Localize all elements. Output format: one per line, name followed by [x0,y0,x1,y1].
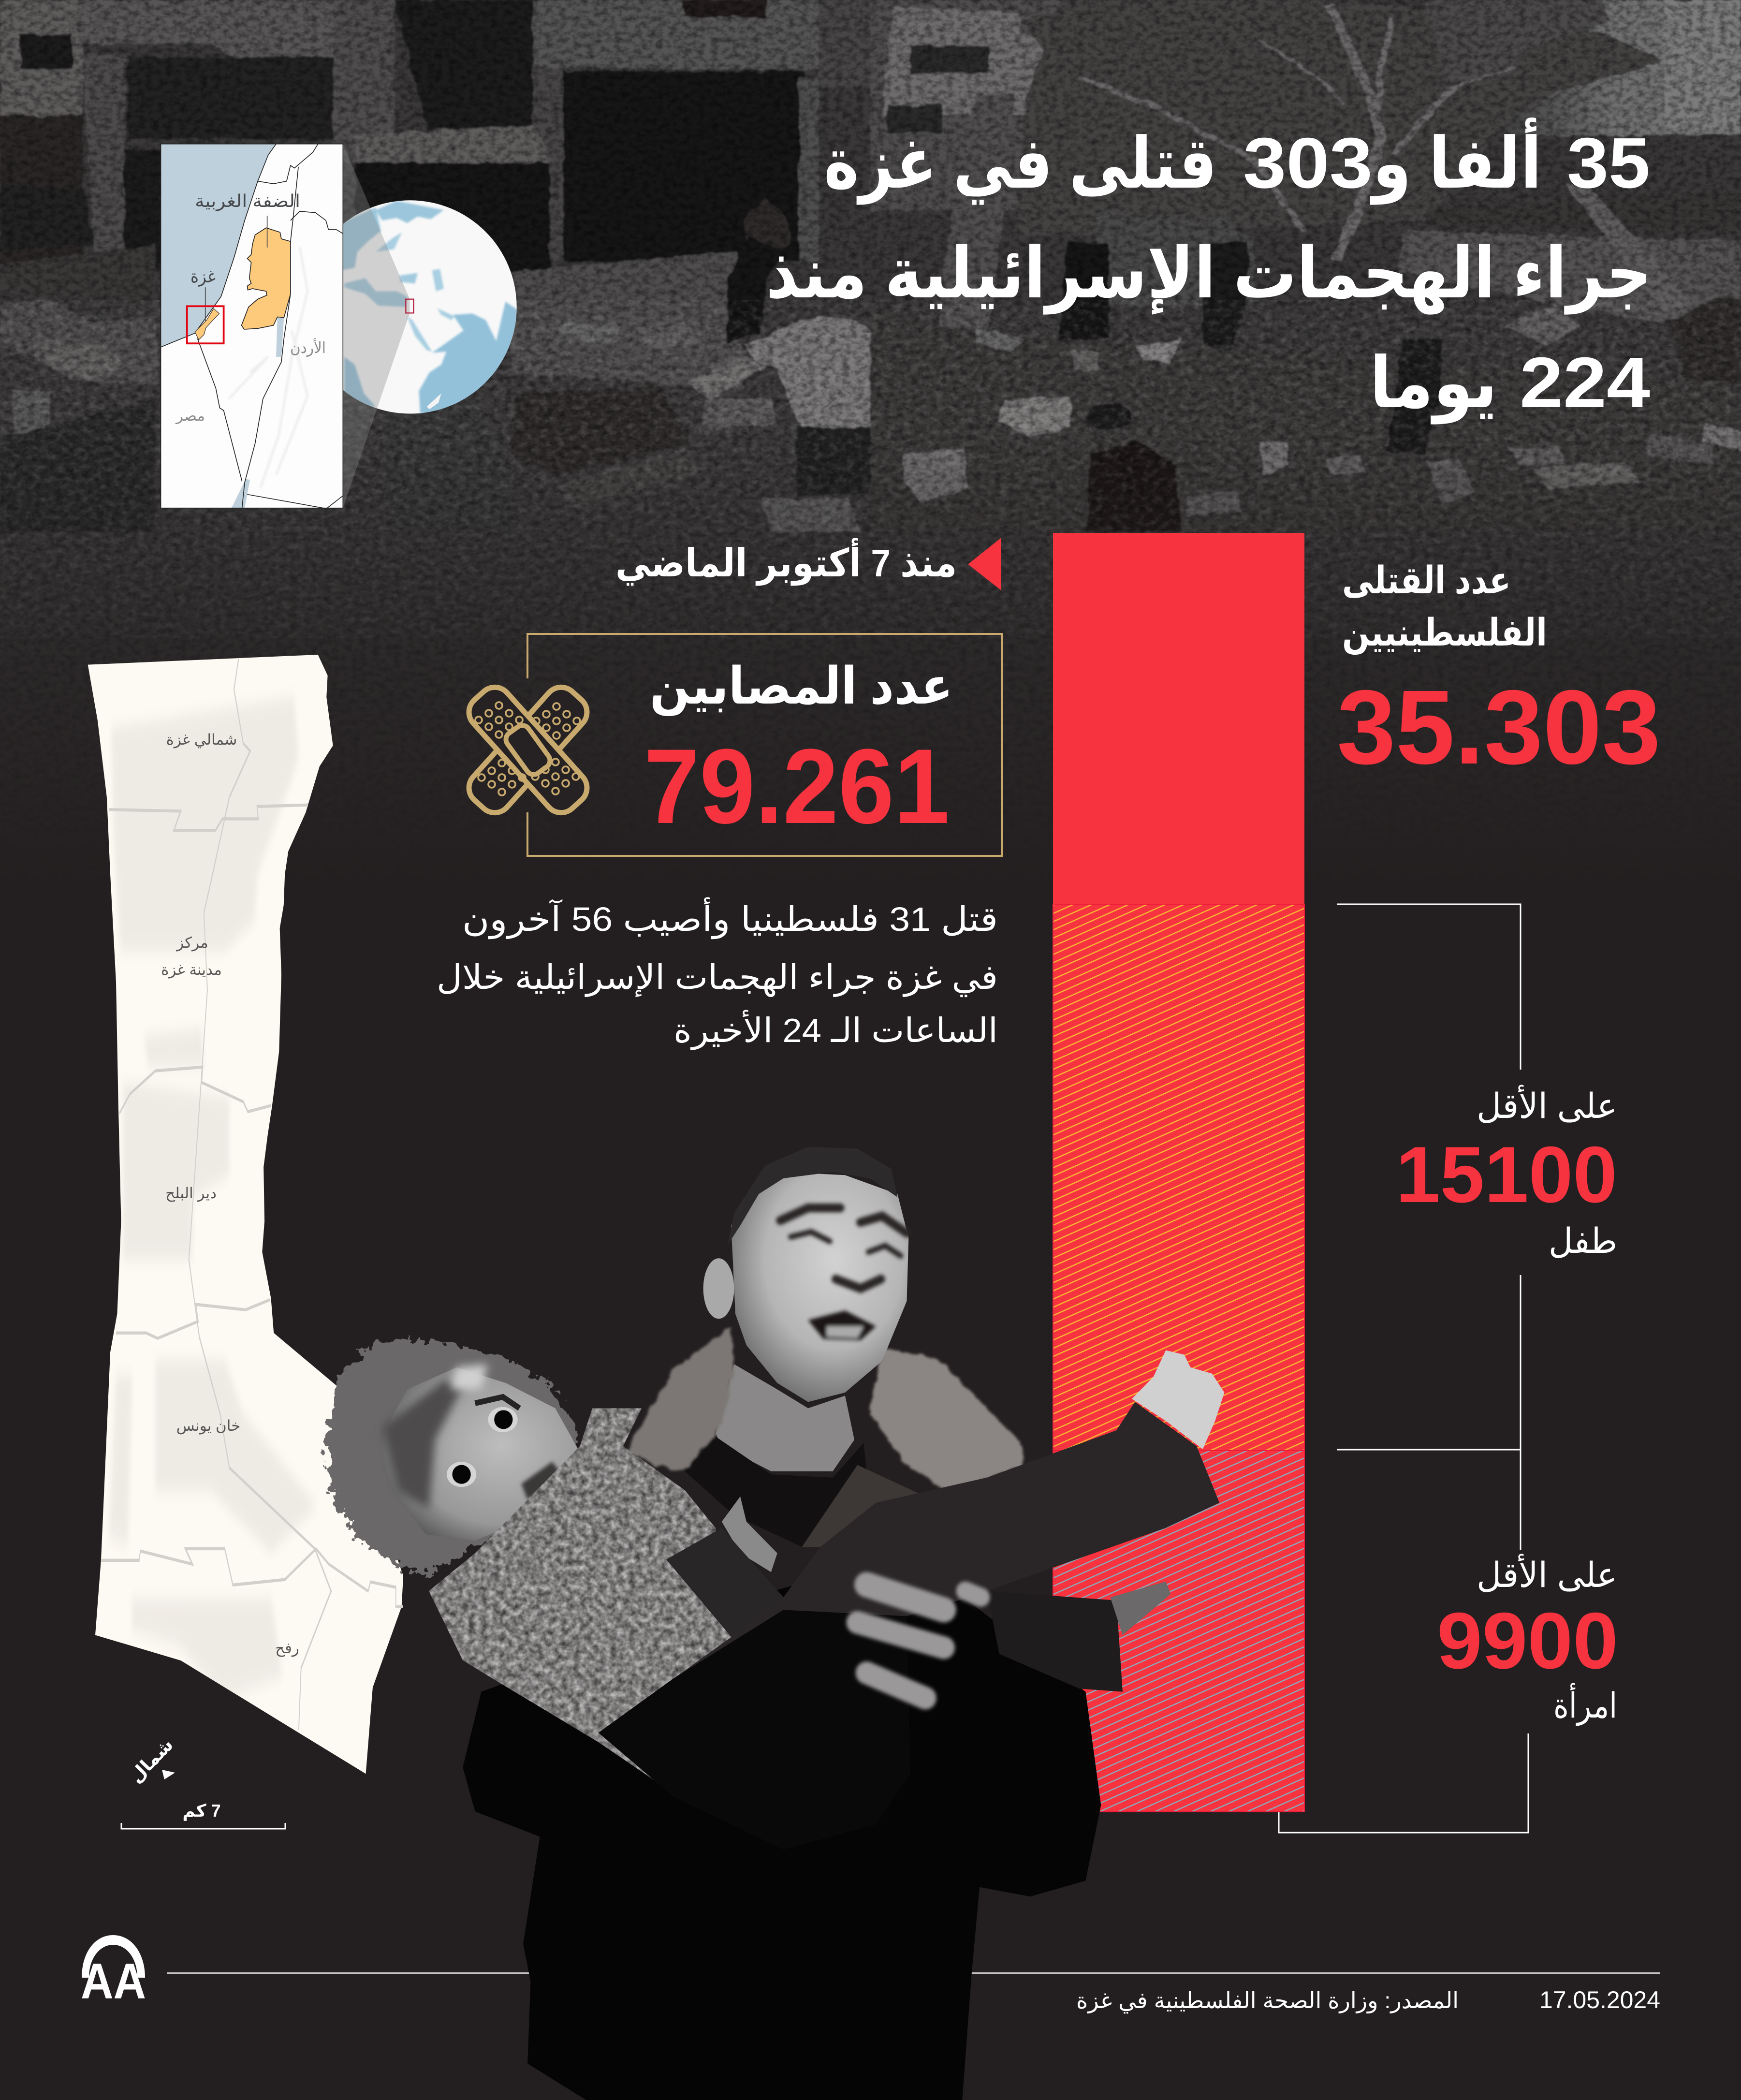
leader lines [266,216,268,248]
since date with arrow: منذ 7 أكتوبر الماضي [615,538,957,586]
title: 303 [1243,123,1373,203]
shirt [685,1437,867,1547]
rubble [870,305,1741,532]
killed total: الفلسطينيين [1342,611,1547,655]
mouth [808,1310,876,1340]
scale bar [121,1801,285,1829]
killed total: 35.303 [1337,669,1661,786]
description paragraph: قتل 31 فلسطينيا وأصيب 56 آخرون [462,897,998,940]
children stat: طفل [1549,1222,1617,1261]
district labels: دير البلح [165,1185,217,1202]
borders [197,144,343,508]
injured box [462,634,1002,856]
collars [626,1326,1024,1493]
child's face [380,1367,583,1541]
map panel [161,144,343,508]
map labels [175,191,326,424]
map labels: غزة [190,266,216,287]
women stat: 9900 [1437,1596,1618,1685]
photo: man carrying injured child [324,1147,1224,2100]
stacked bar [1053,533,1304,1812]
Gaza locator box [187,306,224,343]
man in vest [744,197,791,258]
district labels: رفح [275,1640,299,1657]
Gaza strip [195,308,219,340]
killed total [1337,559,1661,786]
title: يوما [1370,343,1497,425]
description paragraph: في غزة جراء الهجمات الإسرائيلية خلال [437,958,998,998]
children stat: على الأقل [1477,1085,1617,1126]
child's sweater [429,1408,734,1792]
large smooth mounds [383,400,516,532]
child's trousers [599,1402,1219,1850]
title: 224 [1520,343,1650,423]
globe [302,200,517,414]
description paragraph: الساعات الـ 24 الأخيرة [673,1010,998,1050]
inset locator map and globe [161,144,517,508]
district labels [161,731,299,1657]
injured box: عدد المصابين [650,658,953,716]
background photo: destroyed buildings and rubble [0,0,1741,705]
highlight cone [343,144,410,508]
people [1059,241,1109,339]
women stat: على الأقل [1477,1554,1617,1595]
title: جراء الهجمات الإسرائيلية منذ [766,234,1652,315]
icon: bandage [462,680,594,820]
left boulders [0,183,158,532]
date: 17.05.2024 [1539,1986,1660,2013]
sweater cuff [666,1528,783,1648]
hair [728,1147,897,1245]
scale bar: 7 كم [182,1801,221,1821]
child's feet [1132,1351,1224,1449]
child's eyes [447,1397,565,1499]
district labels: مدينة غزة [161,961,222,979]
ear [703,1258,734,1319]
logo: AA [81,1935,146,2010]
tree trunks and branches [1081,7,1514,258]
title: 35 [1567,123,1650,203]
map labels: الأردن [290,338,326,357]
face [731,1172,908,1402]
title: ألفا و [1370,117,1542,205]
map frame [161,144,343,508]
title [766,117,1652,425]
north arrow: شمال [126,1734,177,1787]
man's body [463,1553,1101,2100]
women stat [1437,1554,1618,1726]
footer rule [167,1972,1660,1974]
neck [716,1364,854,1471]
women stat: امرأة [1553,1683,1617,1726]
map labels: مصر [175,408,205,424]
children stat [1396,1085,1617,1261]
child's raised hand [722,1497,777,1572]
title: قتلى في غزة [824,124,1217,205]
urban areas [109,697,317,1699]
Gaza strip map [88,655,403,1774]
description paragraph [437,897,998,1050]
district labels: مركز [176,934,208,952]
killed total: عدد القتلى [1342,559,1511,602]
man's hand [857,1585,981,1698]
district boundaries [101,659,403,1730]
globe marker [406,299,414,313]
jacket [802,1465,981,1547]
bracket lines [1279,904,1528,1833]
child's hair [324,1339,580,1575]
district labels: خان يونس [176,1417,240,1435]
features [780,1208,907,1289]
West Bank [241,228,291,329]
hooded man [744,315,870,431]
district labels: شمالي غزة [166,731,237,749]
logo: AA: AA [81,1953,146,2010]
map labels: الضفة الغربية [195,191,300,211]
injured box: 79.261 [644,727,950,846]
children stat: 15100 [1396,1130,1617,1219]
source text: المصدر: وزارة الصحة الفلسطينية في غزة [1076,1988,1459,2014]
